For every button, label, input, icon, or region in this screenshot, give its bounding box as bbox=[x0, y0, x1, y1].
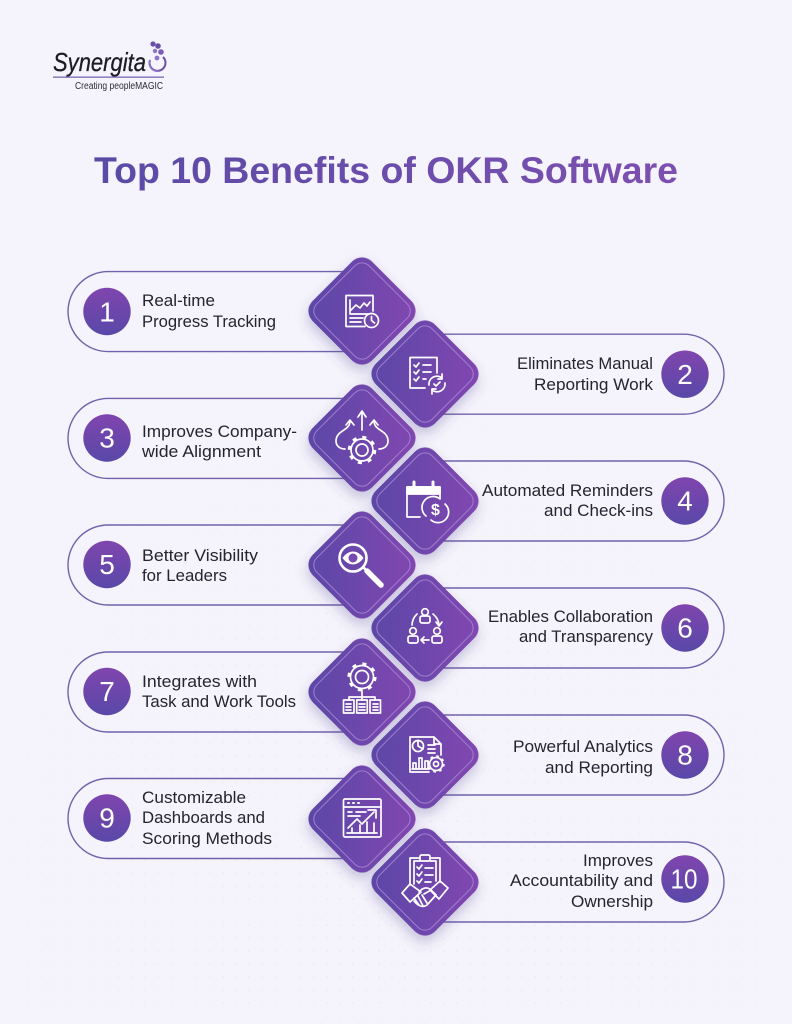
row 4: Automated Reminders and Check-ins: Automated Reminders bbox=[482, 482, 653, 500]
icon: report with pie chart and gear bbox=[410, 737, 444, 772]
row 4: Automated Reminders and Check-ins: and Check-ins bbox=[544, 502, 653, 520]
row 9: Customizable Dashboards and Scoring Methods bbox=[68, 760, 421, 878]
row 4: Automated Reminders and Check-ins bbox=[366, 442, 724, 560]
logo: Synergita bbox=[53, 41, 165, 92]
icon: magnifier with eye bbox=[340, 544, 381, 585]
row 2: Eliminates Manual Reporting Work: Eliminates Manual bbox=[517, 355, 653, 373]
row 2: Eliminates Manual Reporting Work: 2 bbox=[677, 359, 693, 390]
row 5: Better Visibility for Leaders: 5 bbox=[99, 549, 115, 580]
diamond 2 bbox=[366, 315, 484, 433]
row 10: Improves Accountability and Ownership: Ownership bbox=[571, 893, 653, 911]
icon: dashboard window with rising arrow bbox=[344, 799, 381, 837]
diamond 1 bbox=[303, 252, 421, 370]
row 8: Powerful Analytics and Reporting bbox=[366, 696, 724, 814]
row 2: Eliminates Manual Reporting Work bbox=[366, 315, 724, 433]
row 7: Integrates with Task and Work Tools: 7 bbox=[99, 676, 115, 707]
diamond 4 bbox=[366, 442, 484, 560]
title: Top 10 Benefits of OKR Software bbox=[94, 150, 678, 191]
row 5: Better Visibility for Leaders: for Leaders bbox=[142, 567, 227, 585]
row 2: Eliminates Manual Reporting Work: Reporting Work bbox=[534, 376, 654, 394]
row 10: Improves Accountability and Ownership: 10 bbox=[670, 864, 698, 894]
row 6: Enables Collaboration and Transparency bbox=[366, 569, 724, 687]
row 1: Real-time Progress Tracking bbox=[68, 252, 421, 370]
row 10: Improves Accountability and Ownership: Improves bbox=[583, 852, 653, 870]
diamond 9 bbox=[303, 760, 421, 878]
diamond 10 bbox=[366, 823, 484, 941]
logo: Synergita: Synergita bbox=[53, 47, 146, 77]
diamond 5 bbox=[303, 506, 421, 624]
icon: clipboard with handshake bbox=[402, 855, 448, 906]
row 1: Real-time Progress Tracking: Real-time bbox=[142, 292, 215, 310]
row 6: Enables Collaboration and Transparency: Enables Collaboration bbox=[488, 608, 653, 626]
icon: calendar with dollar: $ bbox=[431, 502, 440, 519]
row 4: Automated Reminders and Check-ins: 4 bbox=[677, 486, 693, 516]
row 7: Integrates with Task and Work Tools: Task and Work Tools bbox=[142, 693, 296, 711]
icon: gear with documents bbox=[344, 664, 380, 713]
row 1: Real-time Progress Tracking: Progress Tracking bbox=[142, 313, 276, 331]
row 7: Integrates with Task and Work Tools: Integrates with bbox=[142, 673, 257, 691]
row 8: Powerful Analytics and Reporting: Powerful Analytics bbox=[513, 738, 653, 756]
row 5: Better Visibility for Leaders: Better Visibility bbox=[142, 547, 259, 565]
row 7: Integrates with Task and Work Tools bbox=[68, 633, 421, 751]
icon: checklist with sync bbox=[410, 358, 445, 394]
row 3: Improves Company-wide Alignment: wide Alignment bbox=[141, 443, 261, 461]
row 9: Customizable Dashboards and Scoring Methods: Dashboards and bbox=[142, 809, 265, 827]
row 9: Customizable Dashboards and Scoring Methods: Customizable bbox=[142, 789, 246, 807]
icon: three people cycle bbox=[408, 609, 442, 643]
row 5: Better Visibility for Leaders bbox=[68, 506, 421, 624]
diamond 7 bbox=[303, 633, 421, 751]
row 8: Powerful Analytics and Reporting: 8 bbox=[677, 740, 693, 770]
row 6: Enables Collaboration and Transparency: 6 bbox=[677, 612, 693, 644]
row 9: Customizable Dashboards and Scoring Methods: Scoring Methods bbox=[142, 830, 272, 848]
row 10: Improves Accountability and Ownership bbox=[366, 823, 724, 941]
row 6: Enables Collaboration and Transparency: and Transparency bbox=[519, 628, 654, 646]
row 8: Powerful Analytics and Reporting: and Reporting bbox=[545, 759, 653, 777]
diamond 6 bbox=[366, 569, 484, 687]
row 3: Improves Company-wide Alignment: 3 bbox=[99, 422, 115, 454]
row 10: Improves Accountability and Ownership: Accountability and bbox=[510, 872, 653, 890]
logo: Synergita: Creating peopleMAGIC bbox=[75, 81, 163, 92]
diamond 8 bbox=[366, 696, 484, 814]
row 1: Real-time Progress Tracking: 1 bbox=[99, 296, 115, 328]
background bbox=[144, 600, 652, 1016]
icon: report with clock bbox=[346, 296, 378, 328]
row 3: Improves Company-wide Alignment: Improves Company- bbox=[142, 423, 297, 441]
row 3: Improves Company-wide Alignment bbox=[68, 379, 421, 497]
icon: arrows and gear bbox=[336, 411, 388, 462]
row 9: Customizable Dashboards and Scoring Methods: 9 bbox=[99, 802, 115, 834]
diamond 3 bbox=[303, 379, 421, 497]
